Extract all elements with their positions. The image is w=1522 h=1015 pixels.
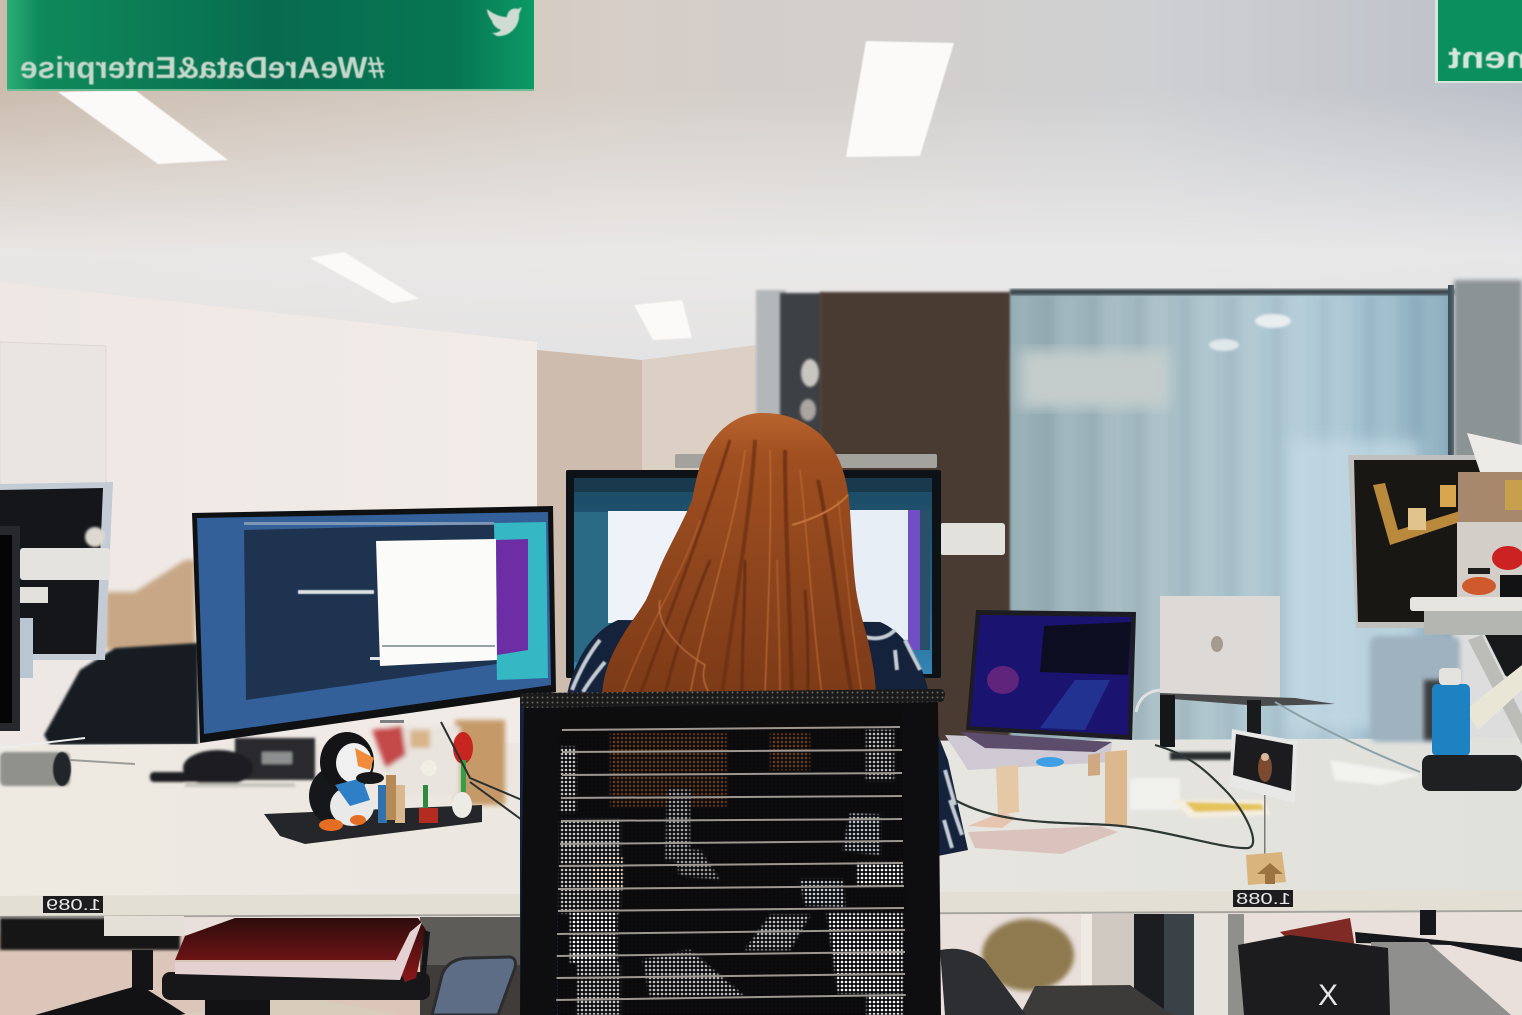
- central monitor: [566, 470, 941, 678]
- wooden block: [1246, 852, 1286, 885]
- items behind penguin: [372, 720, 505, 805]
- ceiling lights: [58, 41, 954, 340]
- open laptop on stand: [945, 610, 1136, 770]
- chair slats: [555, 727, 906, 1000]
- desk tag 1.089: 1.089: [46, 897, 101, 914]
- chair frame: [520, 702, 941, 1015]
- chair back interior, seen through mesh: [556, 708, 906, 1015]
- hanging sign: right edge: [1435, 0, 1522, 83]
- chair top band: [520, 689, 945, 708]
- background monitor behind center: [675, 454, 1005, 555]
- long red hair: [602, 413, 876, 700]
- armrest left: [432, 957, 515, 1015]
- desk tag 1.088: [1233, 890, 1293, 908]
- cables left: [441, 722, 522, 820]
- grey chair and standing-desk frame, right: [1370, 635, 1522, 745]
- closed laptop: [1136, 596, 1420, 772]
- camera box label: X: [1318, 979, 1338, 1012]
- desk: [0, 738, 1522, 918]
- desk tag 1.089: [43, 896, 103, 914]
- left monitor: [192, 506, 556, 743]
- laptop stand, rose gold: [968, 750, 1127, 854]
- office chair: [520, 689, 945, 1015]
- background cardboard and black chair, left: [44, 560, 198, 745]
- far-left monitors: [0, 482, 113, 731]
- hanging sign: #WeAreData&Enterprise: [7, 0, 534, 91]
- armrest right: [940, 949, 1026, 1015]
- desk papers and items: [1130, 752, 1420, 818]
- ceiling: [0, 0, 1522, 360]
- back wall, corridor and glass wall: [0, 280, 1522, 750]
- tray toys: [378, 785, 387, 823]
- penguin toy and tray: [264, 732, 482, 844]
- photo clip holder: [1229, 729, 1297, 885]
- black cables on right desk: [955, 745, 1253, 848]
- power strip: [1422, 755, 1522, 791]
- blue bottle: [1432, 668, 1470, 756]
- right background monitor: [1348, 433, 1522, 635]
- desk power strip, left: [0, 738, 135, 786]
- desk tag 1.088: 1.088: [1236, 891, 1291, 908]
- sign text, mirrored: #WeAreData&Enterprise: [20, 51, 385, 85]
- under-desk items, left: [0, 916, 515, 1015]
- penguin: [309, 732, 384, 831]
- under-desk items, right: [982, 910, 1522, 1015]
- icon: bird: [487, 7, 522, 36]
- floor and under-desk shadow: [0, 912, 1522, 1015]
- woman's blouse: [520, 620, 968, 1015]
- phone and cables behind left monitor: [150, 738, 315, 787]
